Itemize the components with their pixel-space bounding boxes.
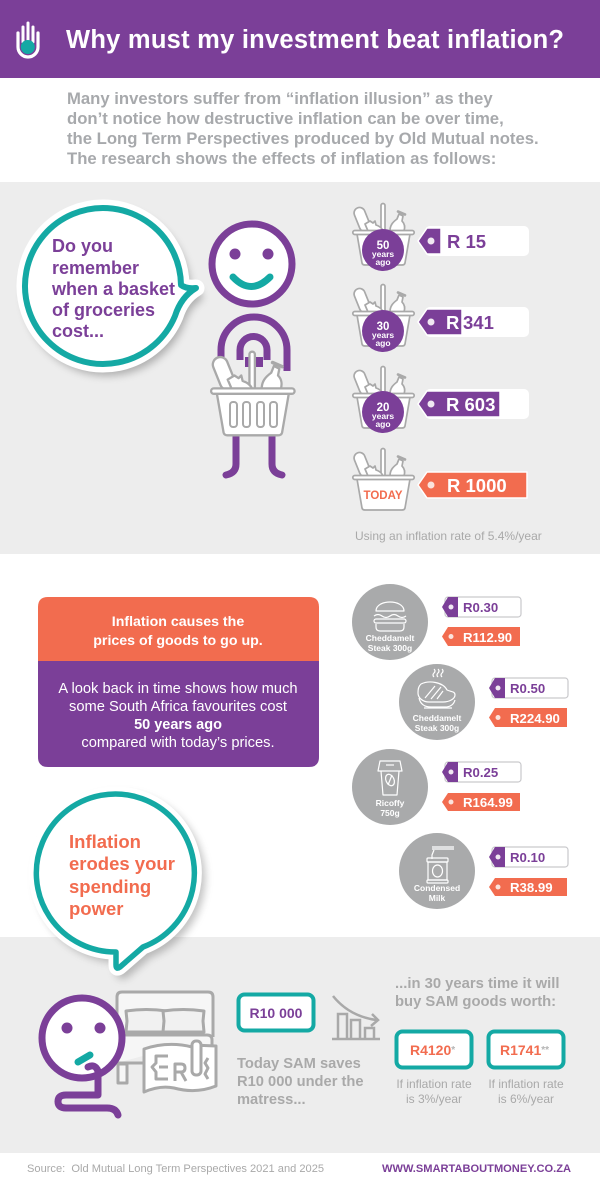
- item: steak: [399, 664, 475, 740]
- legs: [226, 432, 236, 475]
- price tag: R 341: R: [446, 312, 459, 333]
- speech bubble: inflation erodes: power: [69, 898, 123, 919]
- box: R1741: **: [541, 1045, 549, 1056]
- footer website: WWW.SMARTABOUTMONEY.CO.ZA: [382, 1163, 571, 1175]
- price tags: condensed milk: R38.99: [510, 880, 553, 895]
- icon: bed with hidden money: [117, 992, 216, 1092]
- price tag: R 15: [418, 226, 529, 256]
- speech bubble: inflation erodes: Inflation: [69, 831, 141, 852]
- footer source: Source: Old Mutual Long Term Perspectives 2021 and 2025: [27, 1163, 324, 1175]
- panel: savings background: [0, 937, 600, 1153]
- speech bubble: do you remember: when a basket: [51, 279, 175, 299]
- panel: inflation causes: compared with today’s prices.: [81, 735, 275, 751]
- basket row: 50 years ago: ago: [375, 257, 391, 267]
- basket row: 50 years ago: 50: [377, 240, 389, 252]
- price tag: R 341: [418, 307, 529, 337]
- basket row: 30 years ago: 30: [377, 321, 389, 333]
- text: in 30 years: buy SAM goods worth:: [395, 994, 556, 1010]
- speech bubble: do you remember: cost...: [52, 321, 104, 341]
- item: steak: Cheddamelt: [413, 713, 461, 723]
- speech bubble: inflation erodes: erodes your: [69, 853, 175, 874]
- box: R1741: [488, 1032, 564, 1068]
- note: 3 percent: is 3%/year: [406, 1092, 462, 1106]
- speech bubble: inflation erodes: [36, 794, 199, 973]
- speech bubble: do you remember: Do you: [52, 236, 113, 256]
- sad character: [42, 998, 122, 1115]
- panel: inflation causes: A look back in time shows how much: [58, 681, 298, 697]
- title: Why must my investment beat inflation?: [66, 26, 564, 54]
- icon: hand logo: [18, 23, 38, 57]
- panel: inflation causes: [38, 597, 319, 767]
- price tag: R 341: 341: [463, 312, 494, 333]
- icon: coffee cup: [378, 761, 402, 795]
- note: 6 percent: If inflation rate: [488, 1077, 564, 1091]
- basket: [211, 352, 295, 435]
- item: coffee: 750g: [380, 808, 400, 818]
- price tags: burger: R112.90: [463, 630, 512, 645]
- header band: [0, 0, 600, 78]
- text: today SAM saves: Today SAM saves: [237, 1056, 361, 1072]
- price tags: steak: [489, 678, 568, 727]
- note: inflation rate: Using an inflation rate of 5.4%/year: [355, 529, 542, 543]
- basket row: today: [352, 448, 414, 510]
- box: R4120: [396, 1032, 472, 1068]
- price tag: R 15: R 15: [447, 231, 486, 252]
- panel: inflation causes: prices of goods to go up.: [93, 633, 263, 649]
- item: steak: Steak 300g: [415, 723, 459, 733]
- box: R1741: R1741: [500, 1042, 541, 1058]
- box: R10 000: R10 000: [250, 1005, 303, 1021]
- item: coffee: Ricoffy: [376, 798, 405, 808]
- intro text: don’t notice how destructive inflation can be over time,: [67, 109, 504, 128]
- box: R4120: R4120: [410, 1042, 451, 1058]
- box: R4120: *: [451, 1045, 455, 1056]
- note: 6 percent: is 6%/year: [498, 1092, 554, 1106]
- basket row: 30 years ago: [352, 284, 414, 352]
- panel: inflation causes: Inflation causes the: [112, 614, 244, 630]
- price tags: burger: [442, 597, 521, 646]
- intro text: The research shows the effects of inflation as follows:: [67, 149, 496, 168]
- icon: burger: [374, 602, 406, 631]
- price tags: coffee: R164.99: [463, 795, 513, 810]
- price tags: condensed milk: R0.10: [510, 850, 545, 865]
- basket row: today: TODAY: [364, 490, 403, 502]
- character with basket: [211, 224, 295, 475]
- item: burger: [352, 584, 428, 660]
- text: today SAM saves: matress...: [237, 1092, 306, 1108]
- intro text: [67, 89, 539, 168]
- price tags: coffee: [442, 762, 521, 811]
- icon: milk can: [427, 847, 454, 883]
- note: 3 percent: If inflation rate: [396, 1077, 472, 1091]
- basket row: 20 years ago: years: [372, 411, 394, 421]
- price tags: condensed milk: [489, 847, 568, 896]
- basket row: 50 years ago: [352, 204, 414, 271]
- body arcs: [221, 317, 287, 371]
- text: in 30 years: ...in 30 years time it will: [395, 976, 559, 992]
- speech bubble: do you remember: [25, 208, 200, 370]
- basket row: 30 years ago: years: [372, 330, 394, 340]
- item: condensed milk: [399, 833, 475, 909]
- basket row: 30 years ago: ago: [375, 338, 391, 348]
- speech bubble: inflation erodes: spending: [69, 876, 151, 897]
- price tags: coffee: R0.25: [463, 765, 498, 780]
- panel: inflation causes: some South Africa favourites cost: [69, 699, 287, 715]
- basket row: 20 years ago: ago: [375, 419, 391, 429]
- item: condensed milk: Milk: [429, 893, 446, 903]
- intro text: Many investors suffer from “inflation illusion” as they: [67, 89, 493, 108]
- speech bubble: do you remember: of groceries: [52, 300, 155, 320]
- item: condensed milk: Condensed: [414, 883, 460, 893]
- text: today SAM saves: R10 000 under the: [237, 1074, 364, 1090]
- price tag: R 603: [418, 389, 529, 419]
- price tags: steak: R224.90: [510, 711, 560, 726]
- intro text: the Long Term Perspectives produced by Old Mutual notes.: [67, 129, 539, 148]
- icon: steak: [418, 669, 455, 708]
- price tag: R 1000: [418, 472, 527, 498]
- price tags: steak: R0.50: [510, 681, 545, 696]
- item: burger: Steak 300g: [368, 643, 412, 653]
- basket row: 20 years ago: 20: [377, 402, 389, 414]
- item: burger: Cheddamelt: [366, 633, 414, 643]
- price tags: burger: R0.30: [463, 600, 498, 615]
- basket row: 20 years ago: [352, 366, 414, 433]
- head: [212, 224, 292, 304]
- speech bubble: do you remember: remember: [52, 258, 139, 278]
- price tag: R 1000: R 1000: [447, 475, 507, 496]
- basket row: 50 years ago: years: [372, 249, 394, 259]
- price tag: R 603: R 603: [446, 394, 495, 415]
- box: R10 000: [238, 994, 314, 1030]
- panel: inflation causes: 50 years ago: [134, 717, 222, 733]
- icon: falling chart: [332, 996, 380, 1039]
- panel: groceries background: [0, 182, 600, 554]
- item: coffee: [352, 749, 428, 825]
